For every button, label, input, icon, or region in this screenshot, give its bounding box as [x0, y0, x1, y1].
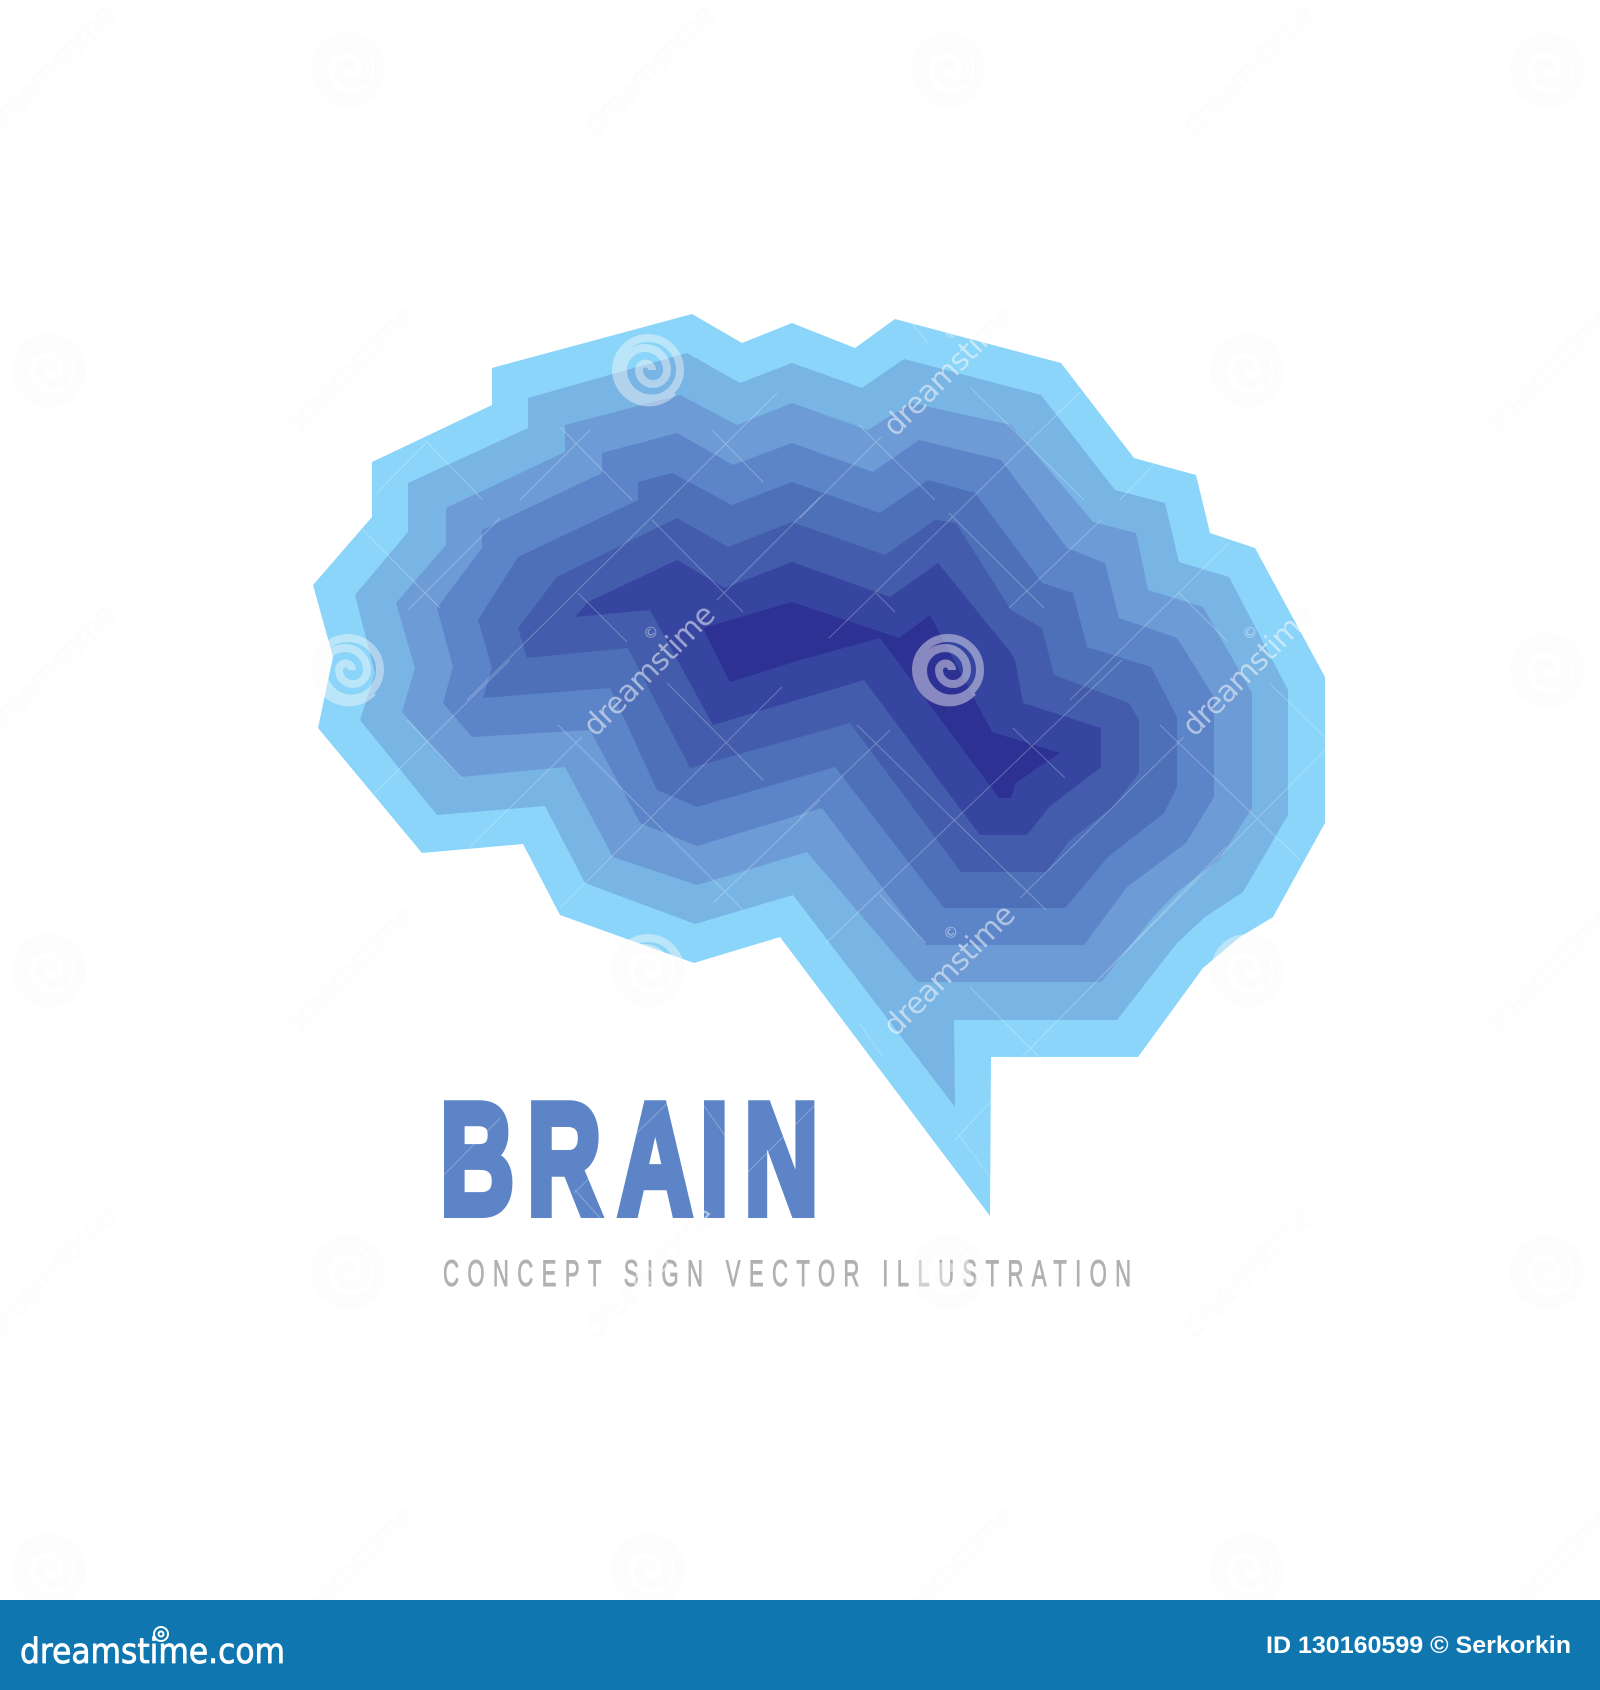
watermark text: ©	[639, 1223, 663, 1246]
watermark text: ©	[939, 1521, 963, 1544]
watermark text: dreamstime	[876, 1497, 1023, 1644]
title: BRAIN: BRAIN	[440, 1071, 818, 1248]
watermark text: dreamstime	[576, 1199, 723, 1346]
watermark text: ©	[40, 1223, 64, 1246]
watermark lines	[363, 320, 1325, 1218]
watermark text: ©	[1538, 921, 1562, 944]
watermark text: ©	[1238, 21, 1262, 44]
watermark text: ©	[939, 921, 963, 944]
brain layer 5	[478, 473, 1177, 908]
brain layer 1: outer light blue with speech-bubble tail	[313, 314, 1325, 1216]
brain layer 2	[355, 353, 1288, 1107]
subtitle: CONCEPT SIGN VECTOR ILLUSTRATION	[443, 1253, 1131, 1294]
footer bar	[0, 1600, 1600, 1690]
watermark text: dreamstime	[876, 297, 1023, 444]
brain layer 8: darkest core	[703, 602, 1060, 798]
watermark text: ©	[639, 621, 663, 644]
watermark text: dreamstime	[576, 0, 723, 144]
footer logo spiral icon	[154, 1627, 168, 1641]
watermark text: ©	[339, 1521, 363, 1544]
footer credit: ID 130160599 © Serkorkin	[1266, 1632, 1571, 1659]
watermark text: ©	[639, 21, 663, 44]
watermark text: ©	[1238, 621, 1262, 644]
watermark text: dreamstime	[1175, 597, 1322, 744]
watermark text: dreamstime	[1175, 1199, 1322, 1346]
watermark text: ©	[339, 921, 363, 944]
watermark text: ©	[40, 21, 64, 44]
watermark text: dreamstime	[276, 897, 423, 1044]
watermark text: ©	[1538, 321, 1562, 344]
brain layer 3	[396, 395, 1252, 982]
watermark text: dreamstime	[876, 897, 1023, 1044]
watermark text: ©	[40, 621, 64, 644]
footer logo text: dreamstime.com	[20, 1632, 285, 1672]
watermark text: ©	[1538, 1521, 1562, 1544]
watermark text: ©	[939, 321, 963, 344]
watermark text: dreamstime	[1175, 0, 1322, 144]
watermark text: dreamstime	[276, 297, 423, 444]
brain illustration	[313, 314, 1325, 1216]
brain layer 4	[437, 433, 1214, 945]
watermark text: ©	[339, 321, 363, 344]
watermark text: ©	[1238, 1223, 1262, 1246]
watermark text: dreamstime	[576, 597, 723, 744]
brain layer 6	[518, 518, 1139, 872]
watermark text: dreamstime	[276, 1497, 423, 1644]
brain layer 7	[575, 560, 1101, 835]
